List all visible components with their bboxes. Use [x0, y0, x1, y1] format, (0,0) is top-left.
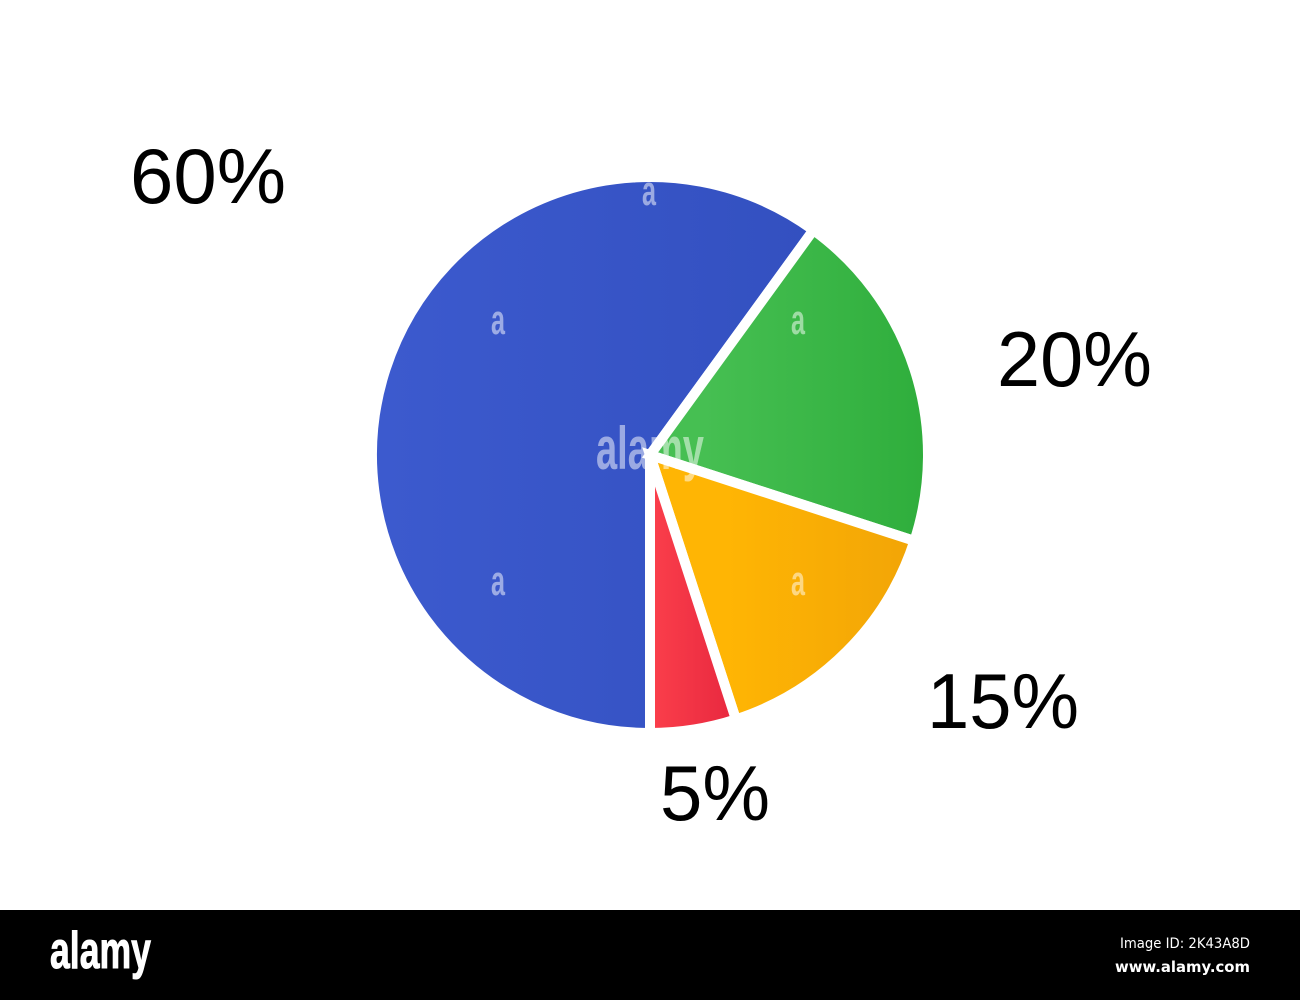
- slice: blue 60%: [372, 177, 813, 733]
- footer bar: [0, 910, 1300, 1000]
- slice: red 5%: [650, 455, 736, 733]
- watermark: lower left: a: [491, 557, 505, 604]
- footer url: www.alamy.com: [1115, 958, 1250, 976]
- slice: green 20%: [650, 230, 928, 541]
- footer image id: Image ID: 2K43A8D: [1120, 936, 1250, 952]
- slice: orange 15%: [650, 455, 914, 719]
- watermark marks: [491, 167, 805, 604]
- label: 15%: 15%: [927, 657, 1079, 745]
- pie chart: [372, 177, 928, 733]
- watermark: top: a: [642, 167, 656, 214]
- footer logo: alamy: [50, 922, 151, 980]
- watermark: center: alamy: [596, 415, 704, 482]
- label: 20%: 20%: [997, 315, 1152, 403]
- watermark: upper right: a: [791, 296, 805, 343]
- label: 60%: 60%: [130, 132, 286, 220]
- label: 5%: 5%: [660, 749, 770, 837]
- watermark: upper left: a: [491, 296, 505, 343]
- watermark: lower right: a: [791, 557, 805, 604]
